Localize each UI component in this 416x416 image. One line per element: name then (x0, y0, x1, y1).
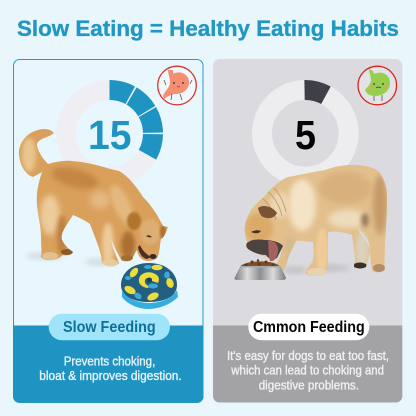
pug ear (258, 206, 277, 218)
label pill: slow feeding: Slow Feeding (63, 319, 156, 336)
common feeding footer band (213, 326, 402, 402)
text: common feeding problems: It's easy for dogs to eat too fast, (227, 349, 389, 363)
text: common feeding problems (227, 349, 389, 392)
slow feeding footer band (13, 326, 204, 402)
label pill: common feeding (248, 314, 369, 340)
paws (307, 268, 327, 276)
pug muzzle and eye (246, 239, 283, 259)
paws highlight (42, 252, 58, 260)
dog face details (138, 245, 151, 259)
icon: sick stomach badge (358, 66, 397, 105)
progress ring: 5 (261, 89, 349, 177)
text: slow feeding benefits (39, 354, 182, 383)
illustration: golden retriever eating (18, 129, 168, 266)
number 15: 15 (88, 112, 132, 158)
label pill: slow feeding (49, 314, 170, 340)
text: slow feeding benefits: Prevents choking, (64, 354, 155, 368)
pug tongue (268, 241, 278, 261)
icon: happy stomach badge (158, 66, 196, 105)
dog shadows (26, 253, 64, 259)
number 5: 5 (295, 112, 316, 158)
dog shadows (310, 265, 350, 271)
panel: common feeding (213, 59, 402, 402)
yellow treat slots (128, 266, 140, 279)
common feeding card background (213, 59, 402, 402)
title: Slow Eating = Healthy Eating Habits (17, 16, 399, 41)
illustration: steel bowl with kibble (234, 259, 286, 280)
label pill: common feeding: Cmmon Feeding (253, 319, 365, 336)
text: slow feeding benefits: bloat & improves digestion. (39, 369, 182, 383)
progress ring: 15 (50, 74, 169, 193)
illustration: slow feeder puzzle bowl (121, 263, 178, 309)
text: common feeding problems: digestive problems. (259, 378, 359, 392)
slow feeding card background (14, 60, 203, 402)
illustration: pug eating fast (244, 164, 387, 276)
center ring (139, 272, 159, 288)
panel: slow feeding (10, 60, 204, 402)
wrinkles on neck (262, 188, 286, 220)
text: common feeding problems: which can lead to choking and (230, 364, 384, 378)
